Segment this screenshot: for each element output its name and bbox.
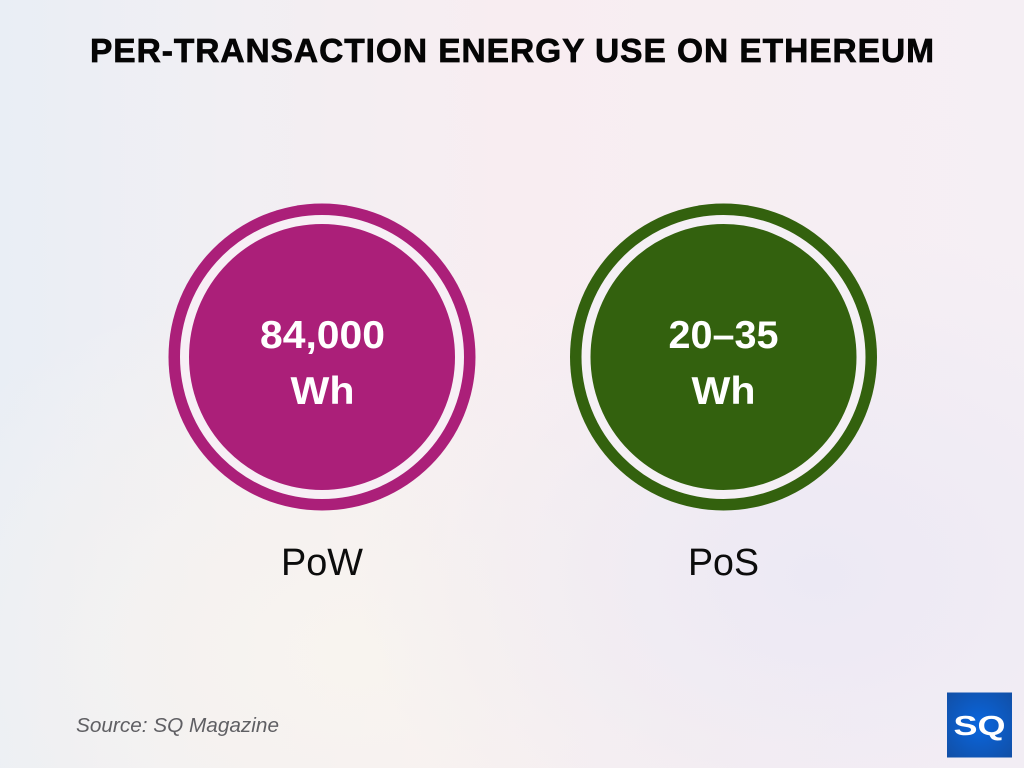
- title: PER-TRANSACTION ENERGY USE ON ETHEREUM: [90, 33, 934, 70]
- source note: Source: SQ Magazine: [76, 715, 279, 737]
- panel: PoS: [570, 204, 877, 584]
- label: PoS: PoS: [688, 542, 759, 584]
- circle: PoW outer badge: [168, 204, 476, 510]
- value: 20–35 Wh: [668, 314, 778, 413]
- logo: SQ: [947, 692, 1012, 758]
- logo: SQ: SQ: [954, 710, 1006, 741]
- circle: PoS outer badge: [570, 204, 877, 510]
- value: 84,000 Wh: 84,000: [260, 314, 385, 357]
- panel: PoW: [168, 204, 476, 584]
- value: 20–35 Wh: 20–35: [668, 314, 778, 357]
- value: 84,000 Wh: Wh: [290, 370, 354, 413]
- value: 20–35 Wh: Wh: [692, 370, 756, 413]
- value: 84,000 Wh: [260, 314, 385, 413]
- label: PoW: PoW: [281, 542, 363, 584]
